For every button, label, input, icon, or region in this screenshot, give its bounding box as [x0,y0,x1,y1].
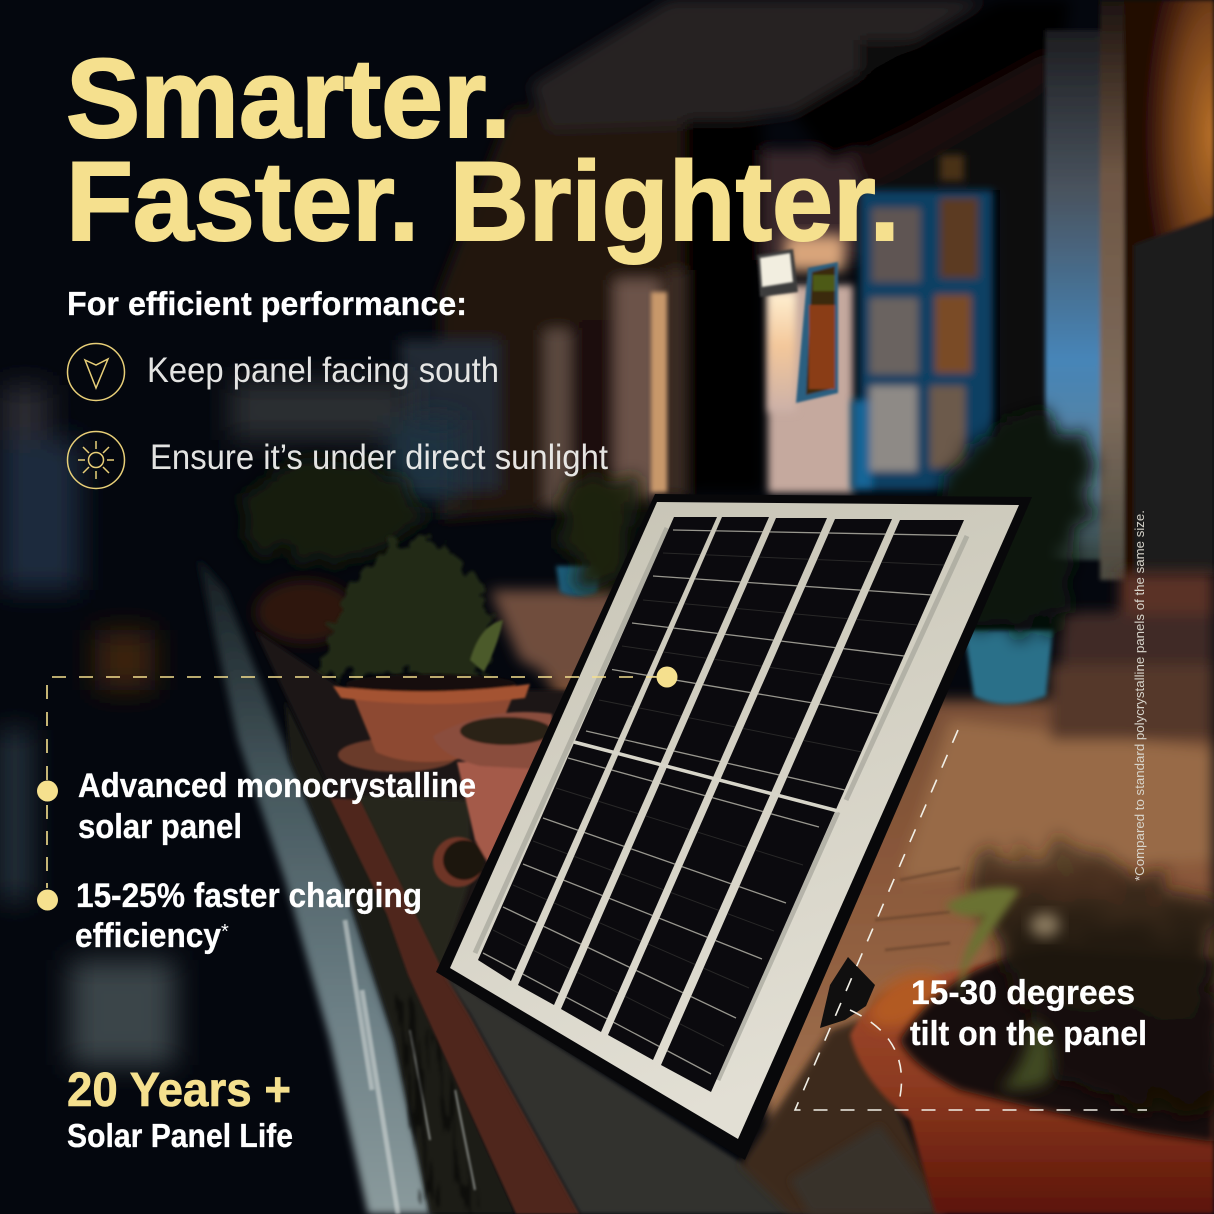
feature: monocrystalline panel: solar panel [78,808,242,846]
tip: direct sunlight [68,432,608,488]
blue pillar and right wall [1045,0,1214,600]
icon: compass arrow [68,344,124,400]
leaves on near plant [470,620,503,672]
tilt dashed lines [795,730,1147,1110]
panel frame [436,494,1032,1160]
far house walls and eaves [400,0,1070,520]
tilt angle guide [795,730,1147,1110]
subheading: For efficient performance: [67,285,467,322]
panel busbar [574,742,838,811]
cell rows [483,530,957,1074]
title: Smarter. [66,36,511,161]
feature: monocrystalline panel [78,767,476,846]
terracotta pots left [333,674,552,887]
lit wall under the lamp [768,235,853,493]
feature: faster charging: 15-25% faster charging [76,877,422,915]
footnote: *Compared to standard polycrystalline panels of the same size. [1132,510,1147,881]
panel edge strips [475,528,967,1080]
stat: panel life: 20 Years + [67,1064,291,1117]
terrace floor [490,572,1214,1214]
dot: monocrystalline [37,780,58,802]
connector to panel [37,666,678,910]
stat: panel life: Solar Panel Life [67,1117,293,1154]
ledge wall [198,558,516,1214]
title: Faster. Brighter. [66,139,900,264]
tilt label: 15-30 degrees [911,974,1135,1012]
foreground pot and plant [740,847,1214,1214]
tilt label: tilt on the panel [910,1015,1147,1053]
tip: facing south [68,344,499,400]
connector lower dash [46,805,48,888]
dot on panel [656,666,678,688]
plants in the distance [240,412,1088,675]
solar cell columns [478,517,964,1092]
feature: faster charging: * [221,921,229,943]
warm strip beside door [651,292,667,492]
panel backing sheet [450,502,1019,1139]
panel stand [820,957,875,1028]
tilt label [910,974,1147,1053]
blue window [852,155,993,490]
feature: faster charging: efficiency [75,917,221,955]
stat: panel life [67,1064,293,1154]
ledge top and lip [255,630,925,1214]
tip text: Ensure it’s under direct sunlight [150,438,608,477]
solar panel [436,494,1032,1160]
mid-left blurred buildings [0,380,460,1065]
dot: charging [37,890,58,910]
flood lamp [757,249,798,297]
tip text: Keep panel facing south [147,351,499,390]
icon: sun [68,432,124,488]
title [66,36,900,264]
tilt arc [850,1010,902,1106]
feature: faster charging [75,877,422,955]
feature: monocrystalline panel: Advanced monocrystalline [78,767,476,805]
floor tile joints [875,868,960,950]
connector dashed line [47,677,660,780]
blue pots [556,566,1053,704]
small window [796,262,838,403]
